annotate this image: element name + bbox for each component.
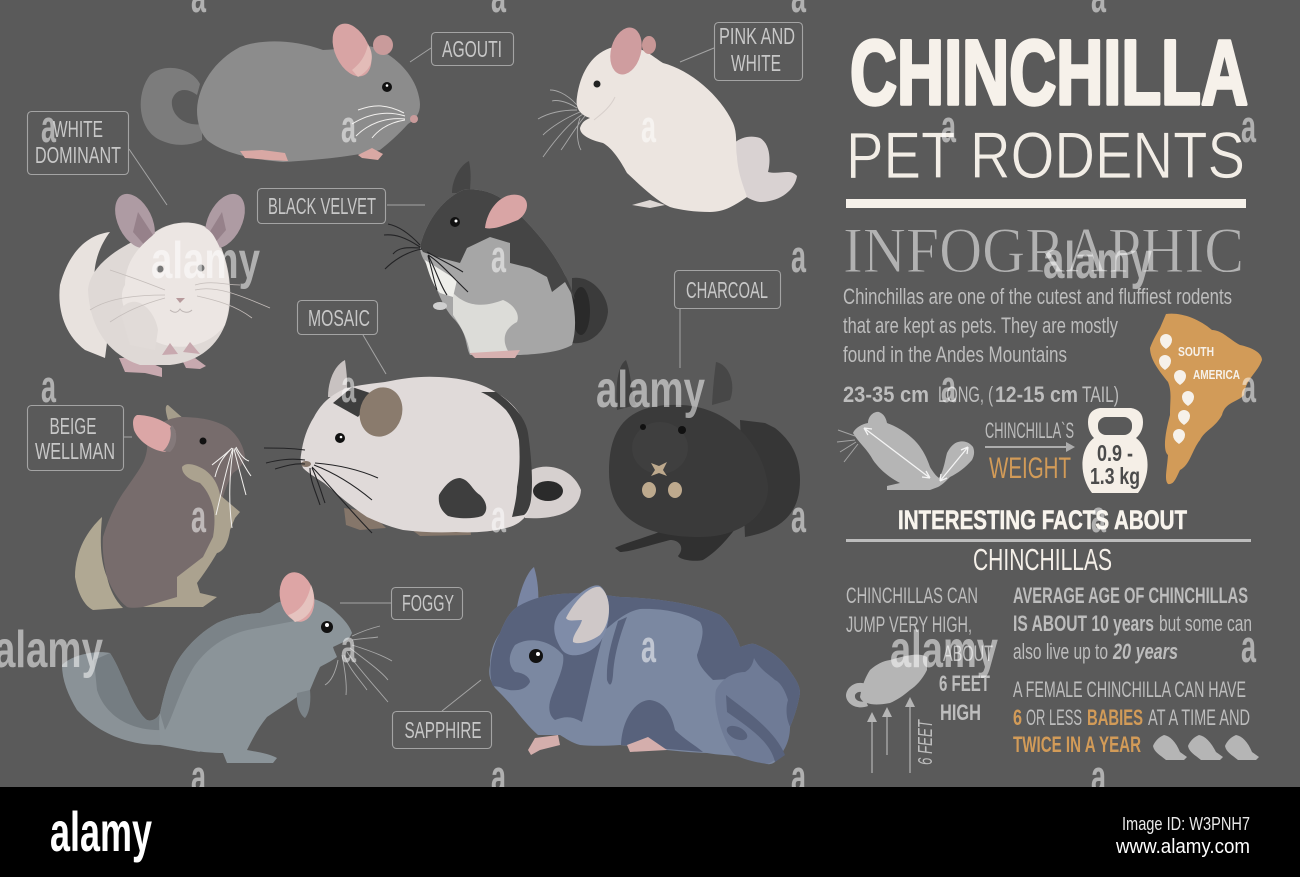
facts heading: [846, 505, 1251, 577]
watermark: stock logos: a: [1241, 361, 1257, 412]
label: beige wellman: BEIGE: [50, 413, 96, 439]
chinchilla: agouti: [141, 17, 420, 162]
label: white dominant: DOMINANT: [35, 142, 121, 168]
watermark: stock logos: alamy: [1043, 232, 1152, 290]
map: South America: AMERICA: [1193, 367, 1240, 382]
chinchilla: black velvet: [384, 161, 608, 358]
intro text: [843, 284, 1232, 367]
icon: jump arrows: [867, 697, 937, 773]
watermark: stock logos: a: [1091, 751, 1107, 802]
infographic heading: INFOGRAPHIC: [843, 215, 1244, 287]
watermark: stock logos: alamy: [890, 621, 998, 679]
label: white dominant: WHITE: [53, 116, 103, 142]
label: pink and white: PINK AND: [719, 23, 795, 49]
chinchilla: white dominant: [59, 187, 270, 377]
label: pink and white: WHITE: [731, 50, 781, 76]
watermark: stock logos: a: [1241, 621, 1257, 672]
label: black velvet: [258, 188, 425, 224]
jump fact text: HIGH: [940, 700, 981, 725]
map: South America: SOUTH: [1178, 344, 1214, 359]
icon: kettlebell: [1082, 408, 1148, 493]
watermark: stock logos: a: [791, 751, 807, 802]
watermark: stock logos: a: [191, 491, 207, 542]
babies fact text: AT A TIME AND: [1148, 705, 1250, 730]
size text: 23-35 cm: [843, 382, 929, 407]
watermark: stock logos: a: [491, 491, 507, 542]
chinchilla: beige wellman: [75, 405, 251, 610]
icons: three baby chinchillas: [1153, 735, 1259, 760]
label: mosaic: [298, 300, 386, 374]
watermark: stock logos: a: [641, 621, 657, 672]
watermark: stock logos: a: [341, 101, 357, 152]
label: charcoal: [674, 270, 780, 368]
watermark: stock logos: a: [191, 751, 207, 802]
age fact text: IS ABOUT 10 years: [1013, 611, 1154, 636]
age fact text: [1013, 583, 1252, 664]
icon: jumping chinchilla: [846, 655, 927, 707]
icon: kettlebell: 0.9 -: [1097, 440, 1133, 466]
label: sapphire: [392, 680, 492, 748]
icon: jump arrows: 6 FEET: [915, 719, 937, 765]
facts heading: CHINCHILLAS: [973, 542, 1112, 577]
icon: kettlebell: 1.3 kg: [1090, 463, 1140, 489]
label: foggy: [340, 588, 462, 620]
watermark: stock logos: a: [1241, 101, 1257, 152]
chinchilla: charcoal: [609, 360, 800, 561]
babies fact text: [1013, 677, 1250, 757]
jump fact text: JUMP VERY HIGH,: [846, 612, 972, 637]
label: charcoal: CHARCOAL: [686, 277, 768, 303]
age fact text: also live up to: [1013, 639, 1108, 664]
age fact text: 20 years: [1112, 639, 1178, 664]
icon: chinchilla size silhouette: [837, 412, 974, 490]
weight text and arrow: WEIGHT: [989, 452, 1071, 485]
label: agouti: [410, 32, 514, 66]
babies fact text: OR LESS: [1026, 705, 1082, 730]
label: pink and white: [680, 22, 802, 80]
jump fact text: 6 FEET: [939, 671, 990, 696]
facts heading: INTERESTING FACTS ABOUT: [898, 505, 1187, 535]
watermark: stock logos: a: [41, 361, 57, 412]
footer band: Image ID: W3PNH7: [1122, 814, 1250, 834]
label: beige wellman: WELLMAN: [35, 438, 115, 464]
label: agouti: AGOUTI: [442, 36, 502, 62]
watermark: stock logos: a: [941, 101, 957, 152]
watermark: stock logos: a: [941, 361, 957, 412]
babies fact text: 6: [1013, 705, 1022, 730]
label: mosaic: MOSAIC: [308, 305, 370, 331]
babies fact text: TWICE IN A YEAR: [1013, 732, 1141, 757]
age fact text: but some can: [1159, 611, 1252, 636]
size text: 12-15 cm: [995, 382, 1078, 407]
label: beige wellman: [28, 406, 132, 470]
label: sapphire: SAPPHIRE: [404, 717, 482, 743]
footer band: alamy: [50, 800, 152, 863]
watermark: stock logos: a: [341, 361, 357, 412]
babies fact text: BABIES: [1087, 705, 1143, 730]
label: foggy: FOGGY: [402, 590, 454, 616]
weight text and arrow: [985, 418, 1075, 485]
chinchilla: foggy: [62, 569, 392, 763]
intro text: found in the Andes Mountains: [843, 342, 1067, 367]
watermark: stock logos: a: [791, 491, 807, 542]
watermark: stock logos: a: [491, 751, 507, 802]
chinchilla: pink and white: [538, 24, 797, 212]
label: white dominant: [28, 112, 167, 205]
label: black velvet: BLACK VELVET: [268, 193, 376, 219]
footer band: www.alamy.com: [1115, 836, 1250, 858]
chinchilla: mosaic: [264, 360, 581, 536]
size text: TAIL): [1082, 382, 1119, 407]
map: South America: [1150, 314, 1262, 484]
size text: [843, 382, 1119, 407]
footer band: [0, 787, 1300, 877]
watermark: stock logos: a: [791, 231, 807, 282]
watermark: stock logos: alamy: [151, 232, 260, 290]
watermark: stock logos: a: [641, 101, 657, 152]
jump fact text: [846, 583, 993, 725]
chinchilla: sapphire: [489, 567, 800, 764]
intro text: that are kept as pets. They are mostly: [843, 313, 1118, 338]
watermark: stock logos: a: [41, 101, 57, 152]
title bar: [846, 199, 1246, 208]
watermark: stock logos: alamy: [596, 361, 705, 419]
watermark: stock logos: a: [1091, 491, 1107, 542]
weight text and arrow: CHINCHILLA`S: [985, 418, 1074, 443]
size text: LONG, (: [938, 382, 993, 407]
watermark: stock logos: a: [341, 621, 357, 672]
jump fact text: ABOUT: [943, 641, 993, 666]
watermark: stock logos: a: [491, 231, 507, 282]
jump fact text: CHINCHILLAS CAN: [846, 583, 978, 608]
